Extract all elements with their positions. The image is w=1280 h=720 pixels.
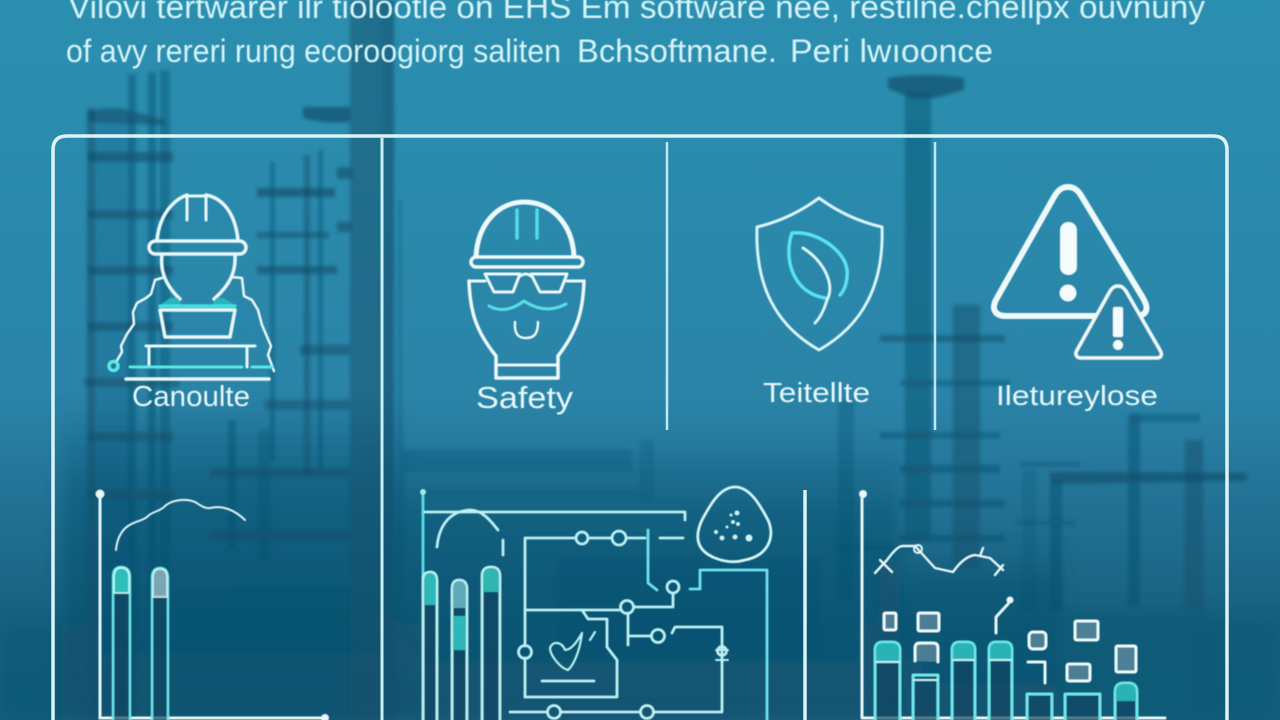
label: Teitellte: Teitellte: [763, 377, 870, 408]
main column: [350, 0, 382, 720]
icon: shield with leaf: [757, 198, 882, 350]
icon: construction worker: [109, 195, 274, 379]
chart: right bar chart with floating tiles: [859, 490, 1165, 720]
intro text: Peri lwıoonce: [790, 33, 993, 69]
chart: centre bars and circuit diagram: [420, 487, 771, 720]
right tall tower: [905, 92, 931, 542]
icon: warning triangles: [994, 187, 1161, 358]
icon: safety head with goggles: [469, 202, 584, 378]
divider right of circuit: [803, 490, 807, 720]
intro text: [66, 0, 1205, 69]
outer panel frame with dividers: [53, 136, 1227, 720]
right tanks and pipes: [1128, 415, 1140, 605]
middle distance: [402, 450, 632, 472]
intro text: Bchsoftmane.: [577, 33, 777, 69]
intro text: of avy rereri rung ecoroogiorg saliten: [66, 33, 561, 69]
chart: left bar chart: [96, 490, 329, 720]
label: Safety: Safety: [476, 380, 574, 415]
left column tower: [128, 74, 136, 720]
label: Iletureylose: Iletureylose: [996, 380, 1158, 411]
label: Canoulte: Canoulte: [132, 381, 250, 413]
stair structure: [257, 188, 335, 197]
